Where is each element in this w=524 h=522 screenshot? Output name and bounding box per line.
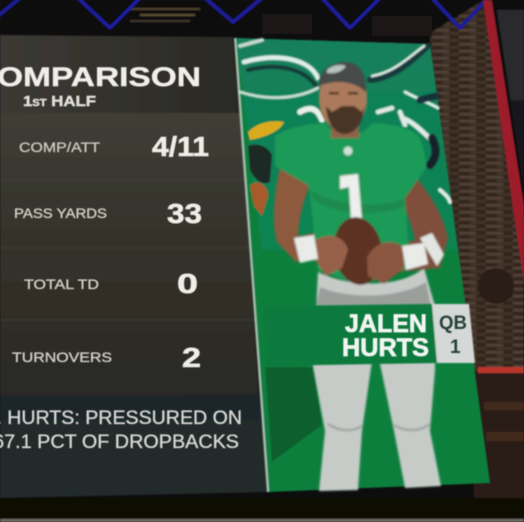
footer background — [0, 395, 268, 498]
player name: JALEN — [345, 310, 427, 338]
position label: QB — [439, 313, 467, 334]
position label: 1 — [450, 337, 461, 358]
row: pass yards — [14, 198, 202, 229]
footnote: pressure stat: 67.1 PCT OF DROPBACKS — [0, 431, 239, 453]
row: turnovers: TURNOVERS — [12, 349, 112, 365]
jersey number 1 — [340, 174, 362, 220]
row: total td: TOTAL TD — [24, 276, 99, 292]
row: turnovers: 2 — [182, 342, 201, 373]
panel: player card — [235, 38, 490, 492]
header background — [0, 35, 240, 113]
row: comp/att — [19, 131, 209, 162]
row: comp/att: 4/11 — [152, 131, 209, 162]
player name: HURTS — [342, 334, 429, 362]
row: pass yards: PASS YARDS — [14, 205, 107, 221]
heading: comparison: OMPARISON — [0, 62, 201, 92]
red vertical accent stripe — [483, 0, 524, 285]
head and cap — [319, 62, 367, 138]
heading: comparison — [0, 62, 201, 110]
row: total td — [24, 268, 198, 299]
position label — [439, 313, 467, 358]
background eagle artwork — [240, 40, 450, 202]
jersey — [275, 123, 426, 285]
blue neon zigzag lights — [0, 0, 488, 28]
heading: comparison: 1ST HALF — [23, 93, 96, 110]
footnote: pressure stat — [0, 407, 242, 453]
row: pass yards: 33 — [167, 198, 202, 229]
pants — [313, 268, 441, 491]
player name — [342, 310, 429, 362]
wristbands — [294, 235, 318, 263]
football — [330, 214, 386, 288]
row: comp/att: COMP/ATT — [19, 139, 101, 155]
name banner — [263, 304, 475, 366]
stat rows background — [0, 113, 259, 396]
panel: stats comparison — [0, 35, 268, 498]
row: total td: 0 — [177, 268, 198, 299]
position box — [432, 304, 475, 363]
card frame — [235, 38, 490, 492]
arms — [274, 160, 322, 262]
player: jalen hurts — [274, 62, 448, 491]
hands — [314, 236, 348, 276]
row: turnovers — [12, 342, 201, 373]
